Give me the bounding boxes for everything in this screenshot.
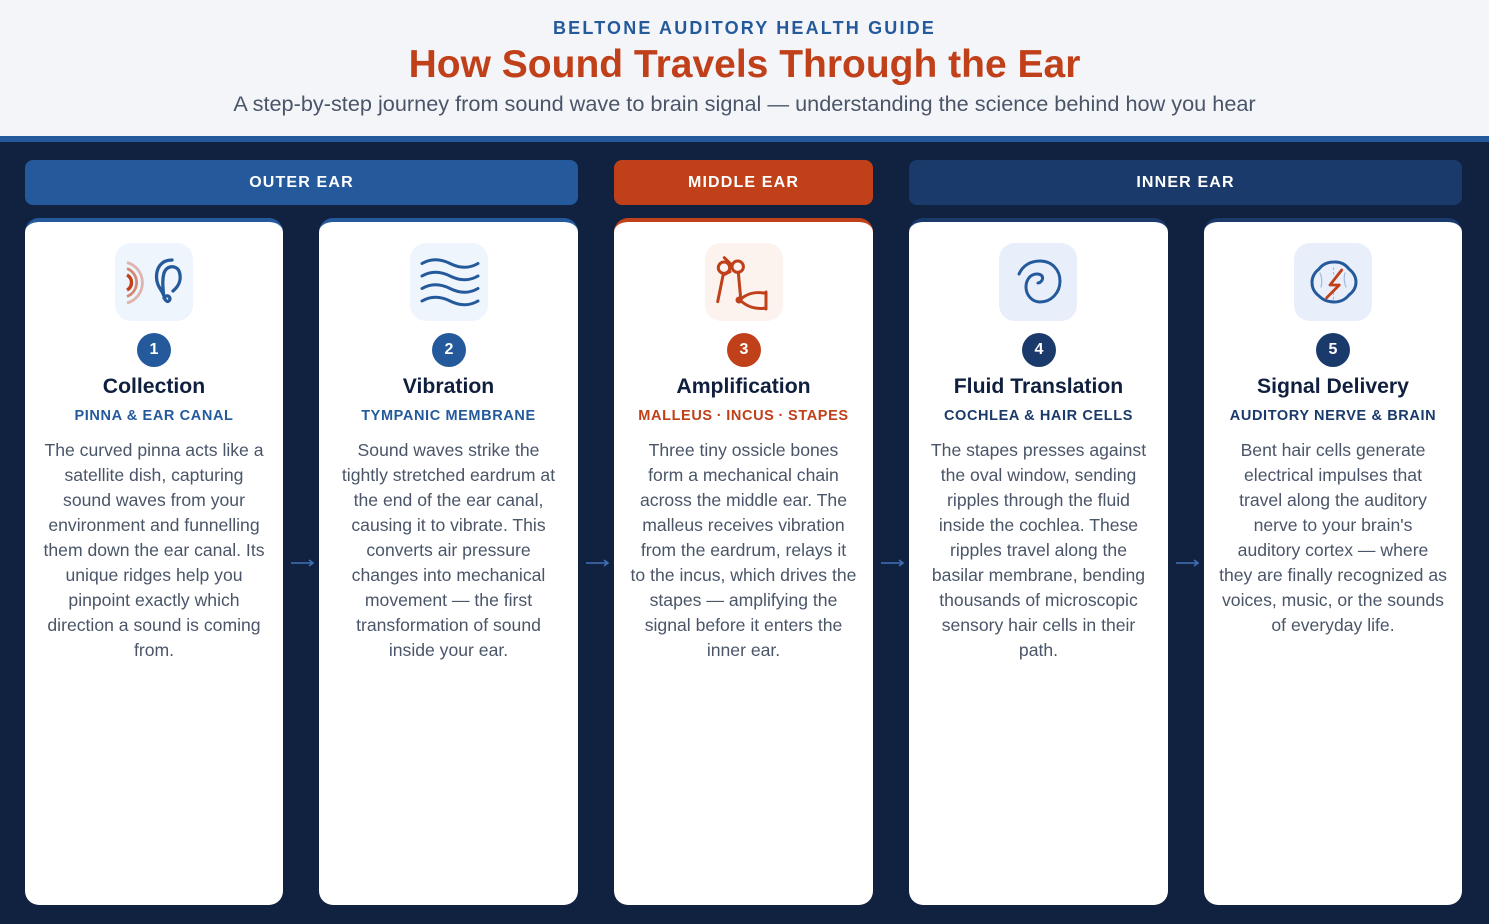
- panel: step 4 fluid translation: [909, 218, 1168, 905]
- body text: Bent hair cells generate: [1241, 440, 1425, 460]
- body text: to the incus, which drives the: [631, 565, 856, 585]
- body text: basilar membrane, bending: [932, 565, 1145, 585]
- body text: direction a sound is coming: [47, 615, 261, 635]
- subheading: AUDITORY NERVE & BRAIN: [1230, 408, 1436, 424]
- body text: from.: [134, 640, 174, 660]
- step number 5: 5: [1329, 341, 1337, 358]
- heading: Signal Delivery: [1257, 375, 1409, 398]
- body text: converts air pressure: [366, 540, 531, 560]
- body text: [43, 440, 265, 660]
- body text: causing it to vibrate. This: [351, 515, 546, 535]
- body text: [931, 440, 1146, 660]
- body text: them down the ear canal. Its: [43, 540, 265, 560]
- body text: they are finally recognized as: [1219, 565, 1447, 585]
- arrow 1 to 2: [291, 560, 314, 566]
- body text: The stapes presses against: [931, 440, 1146, 460]
- heading: Fluid Translation: [954, 375, 1123, 398]
- band: middle ear: [614, 160, 873, 205]
- step number 1: [137, 333, 171, 367]
- body text: unique ridges help you: [65, 565, 243, 585]
- body text: inside your ear.: [389, 640, 508, 660]
- body text: stapes — amplifying the: [650, 590, 837, 610]
- title: How Sound Travels Through the Ear: [409, 43, 1080, 86]
- icon: waves: [410, 243, 488, 321]
- body text: [1219, 440, 1447, 635]
- subheading: COCHLEA & HAIR CELLS: [944, 408, 1133, 424]
- panel: step 3 amplification: [614, 218, 873, 905]
- header: [0, 0, 1489, 142]
- body text: form a mechanical chain: [648, 465, 839, 485]
- subheading: TYMPANIC MEMBRANE: [361, 408, 536, 424]
- body text: from the eardrum, relays it: [641, 540, 846, 560]
- heading: Vibration: [403, 375, 494, 398]
- body text: transformation of sound: [356, 615, 541, 635]
- step number 3: 3: [740, 341, 748, 358]
- subheading: PINNA & EAR CANAL: [74, 408, 234, 424]
- body text: thousands of microscopic: [939, 590, 1138, 610]
- body text: of everyday life.: [1271, 615, 1395, 635]
- body text: malleus receives vibration: [642, 515, 845, 535]
- body text: pinpoint exactly which: [68, 590, 240, 610]
- eyebrow label: BELTONE AUDITORY HEALTH GUIDE: [553, 18, 936, 38]
- arrow 3 to 4: [881, 560, 904, 566]
- body text: electrical impulses that: [1244, 465, 1422, 485]
- step number 4: [1022, 333, 1056, 367]
- step number 5: [1316, 333, 1350, 367]
- body text: inside the cochlea. These: [939, 515, 1138, 535]
- body text: auditory cortex — where: [1238, 540, 1428, 560]
- band: inner ear: [909, 160, 1462, 205]
- panel: step 5 signal delivery: [1204, 218, 1462, 905]
- body text: ripples travel along the: [950, 540, 1127, 560]
- heading: Amplification: [676, 375, 811, 398]
- body text: ripples through the fluid: [947, 490, 1130, 510]
- body text: sound waves from your: [63, 490, 245, 510]
- body text: Sound waves strike the: [358, 440, 539, 460]
- icon: brain with lightning: [1294, 243, 1372, 321]
- step number 2: 2: [445, 341, 453, 358]
- heading: Collection: [103, 375, 205, 398]
- body text: Three tiny ossicle bones: [649, 440, 838, 460]
- arrow 2 to 3: [586, 560, 610, 566]
- body text: sensory hair cells in their: [942, 615, 1135, 635]
- band: middle ear: MIDDLE EAR: [688, 174, 799, 191]
- body text: inner ear.: [707, 640, 780, 660]
- body text: voices, music, or the sounds: [1222, 590, 1444, 610]
- body text: across the middle ear. The: [640, 490, 847, 510]
- body text: [342, 440, 555, 660]
- body text: changes into mechanical: [352, 565, 545, 585]
- step number 1: 1: [150, 341, 158, 358]
- body text: movement — the first: [365, 590, 532, 610]
- body text: satellite dish, capturing: [64, 465, 243, 485]
- body text: nerve to your brain's: [1254, 515, 1412, 535]
- body text: environment and funnelling: [48, 515, 260, 535]
- step number 3: [727, 333, 761, 367]
- body text: the oval window, sending: [941, 465, 1136, 485]
- step number 4: 4: [1035, 341, 1043, 358]
- band: inner ear: INNER EAR: [1136, 174, 1235, 191]
- body text: path.: [1019, 640, 1058, 660]
- subtitle: A step-by-step journey from sound wave to brain signal — understanding the science behind how you hear: [233, 91, 1256, 116]
- panel: step 2 vibration: [319, 218, 578, 905]
- icon: cochlea spiral: [999, 243, 1077, 321]
- body text: tightly stretched eardrum at: [342, 465, 555, 485]
- body text: signal before it enters the: [645, 615, 842, 635]
- icon: ear with sound waves: [115, 243, 193, 321]
- body text: the end of the ear canal,: [354, 490, 543, 510]
- icon: ossicle bones: [705, 243, 783, 321]
- body text: travel along the auditory: [1239, 490, 1427, 510]
- body text: [630, 440, 856, 660]
- panel: step 1 collection: [25, 218, 283, 905]
- arrow 4 to 5: [1176, 560, 1200, 566]
- body text: The curved pinna acts like a: [44, 440, 264, 460]
- band: outer ear: OUTER EAR: [249, 174, 354, 191]
- step number 2: [432, 333, 466, 367]
- subheading: MALLEUS · INCUS · STAPES: [638, 408, 849, 424]
- band: outer ear: [25, 160, 578, 205]
